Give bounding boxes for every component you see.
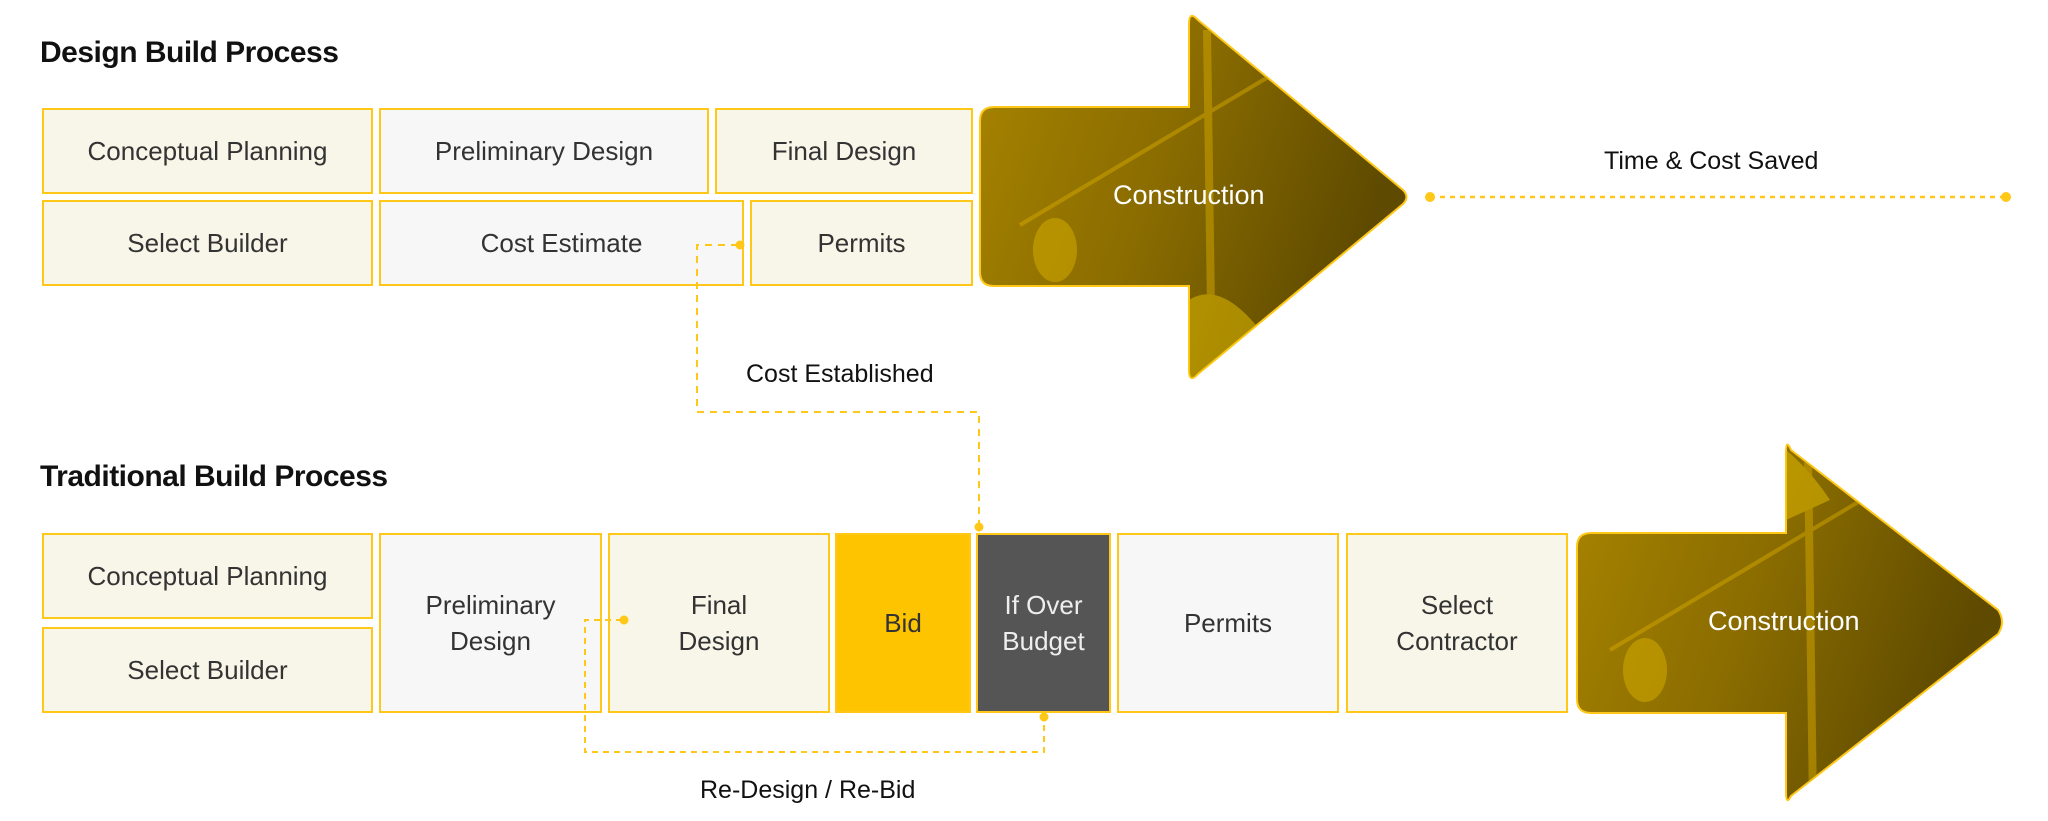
box: select contractor: Contractor <box>1396 626 1518 656</box>
box: if over budget: Budget <box>1002 626 1085 656</box>
box: cost estimate <box>379 200 744 286</box>
arrow: design build construction <box>980 16 1406 380</box>
connector: time & cost saved <box>1426 192 2010 202</box>
box: permits: Permits <box>817 228 906 258</box>
box: conceptual planning: Conceptual Planning <box>88 136 327 166</box>
box: bid: Bid <box>884 608 922 638</box>
box: select builder <box>42 200 373 286</box>
box: final design 2: Design <box>679 626 759 656</box>
box: preliminary design 2: Design <box>450 626 531 656</box>
connector: re-design loop <box>585 616 1048 752</box>
box: final design <box>715 108 973 194</box>
box: if over budget <box>976 533 1111 713</box>
box: if over budget: If Over <box>1004 590 1082 620</box>
title: traditional: Traditional Build Process <box>40 460 388 493</box>
box: preliminary design 2: Preliminary <box>425 590 556 620</box>
box: conceptual planning 2 <box>42 533 373 619</box>
box: permits 2: Permits <box>1184 608 1272 638</box>
arrow: traditional construction <box>1577 444 2002 805</box>
box: conceptual planning 2: Conceptual Planning <box>88 561 327 591</box>
box: cost estimate: Cost Estimate <box>481 228 642 258</box>
box: select contractor: Select <box>1421 590 1493 620</box>
box: select builder 2 <box>42 627 373 713</box>
label: cost established: Cost Established <box>746 360 934 388</box>
box: select builder 2: Select Builder <box>127 655 288 685</box>
label: construction bottom: Construction <box>1708 606 1860 636</box>
box: bid <box>835 533 971 713</box>
box: preliminary design <box>379 108 709 194</box>
title: design build: Design Build Process <box>40 36 338 69</box>
box: select contractor <box>1346 533 1568 713</box>
connector: cost established <box>697 240 984 532</box>
box: permits 2 <box>1117 533 1339 713</box>
box: preliminary design: Preliminary Design <box>435 136 653 166</box>
box: final design 2 <box>608 533 830 713</box>
box: select builder: Select Builder <box>127 228 288 258</box>
box: conceptual planning <box>42 108 373 194</box>
box: preliminary design 2 <box>379 533 602 713</box>
label: construction top: Construction <box>1113 180 1265 210</box>
box: permits <box>750 200 973 286</box>
label: re-design: Re-Design / Re-Bid <box>700 776 915 804</box>
label: time & cost saved: Time & Cost Saved <box>1604 147 1818 175</box>
box: final design: Final Design <box>772 136 916 166</box>
box: final design 2: Final <box>691 590 747 620</box>
